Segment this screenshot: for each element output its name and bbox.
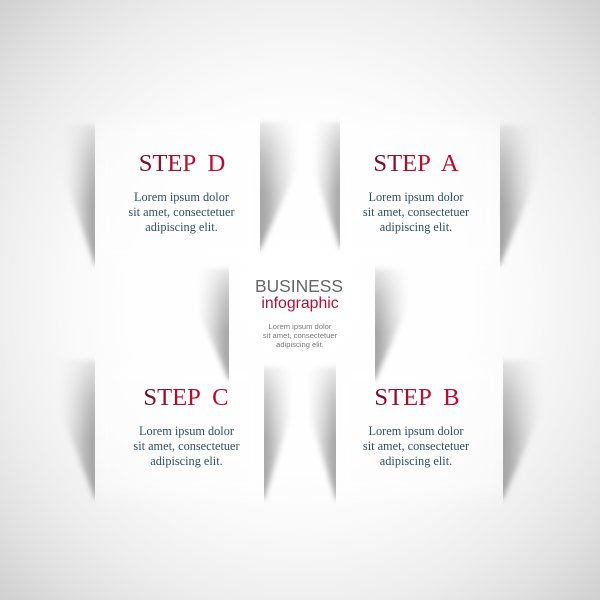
soft white card bases <box>95 122 503 495</box>
subheading: infographic: infographic <box>261 295 339 312</box>
text: step D body: adipiscing elit. <box>145 220 218 234</box>
heading: business: BUSINESS <box>255 276 343 296</box>
heading: step C: STEP C <box>143 384 229 411</box>
text: step D body: Lorem ipsum dolor <box>134 190 229 204</box>
text: step C body: adipiscing elit. <box>150 454 223 468</box>
text: step B body <box>363 424 469 468</box>
panel: centre business infographic <box>229 266 375 366</box>
panel: step D <box>95 122 260 267</box>
text: centre body: sit amet, consectetuer <box>263 331 338 340</box>
text: centre body: Lorem ipsum dolor <box>269 322 332 331</box>
text: centre body: adipiscing elit. <box>276 340 324 349</box>
panel: step B <box>336 360 503 500</box>
text: step A body <box>363 190 469 234</box>
panel: step C <box>95 360 264 500</box>
text: step A body: sit amet, consectetuer <box>363 205 469 219</box>
text: step A body: Lorem ipsum dolor <box>369 190 463 204</box>
text: step C body: Lorem ipsum dolor <box>139 424 234 438</box>
text: step C body: sit amet, consectetuer <box>133 439 240 453</box>
text: step B body: Lorem ipsum dolor <box>369 424 463 438</box>
text: step D body: sit amet, consectetuer <box>128 205 235 219</box>
heading: step B: STEP B <box>374 384 460 411</box>
text: centre body <box>263 322 338 349</box>
text: step B body: adipiscing elit. <box>380 454 452 468</box>
shadows beside cards <box>58 122 545 499</box>
text: step A body: adipiscing elit. <box>380 220 452 234</box>
heading: step D: STEP D <box>139 150 225 177</box>
heading: step A: STEP A <box>373 150 459 177</box>
text: step C body <box>133 424 240 468</box>
panel: step A <box>340 122 500 267</box>
text: step B body: sit amet, consectetuer <box>363 439 469 453</box>
text: step D body <box>128 190 235 234</box>
